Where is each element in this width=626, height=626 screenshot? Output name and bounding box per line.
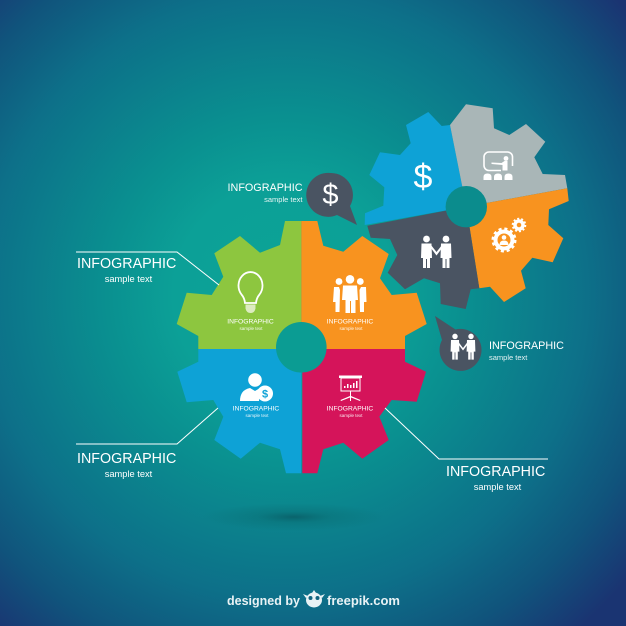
label: blue segment bbox=[233, 406, 279, 418]
label: left lower: sample text bbox=[105, 469, 153, 479]
callout: dollar bubble bbox=[306, 173, 357, 225]
label: crimson segment: INFOGRAPHIC bbox=[327, 406, 373, 412]
icon: three people bbox=[333, 275, 366, 313]
label: green segment: sample text bbox=[239, 326, 263, 331]
segment: gray bbox=[450, 104, 567, 207]
label: right callout: sample text bbox=[489, 353, 528, 362]
footer credit: designed by bbox=[227, 594, 300, 608]
icon: light bulb bbox=[238, 272, 262, 313]
label: left upper: sample text bbox=[105, 274, 153, 284]
icon: gears bbox=[493, 219, 525, 251]
label: left lower: INFOGRAPHIC bbox=[77, 451, 176, 467]
label: top callout bbox=[228, 182, 303, 204]
big gear bbox=[177, 221, 427, 473]
segment: crimson bbox=[302, 349, 426, 473]
label: right lower: INFOGRAPHIC bbox=[446, 464, 545, 480]
icon: presentation board bbox=[339, 376, 362, 401]
icon: handshake in bubble bbox=[451, 334, 475, 360]
label: crimson segment bbox=[327, 406, 373, 418]
icon: freepik logo bbox=[303, 590, 325, 608]
icon: presentation bbox=[484, 152, 512, 180]
label: left lower bbox=[77, 451, 176, 479]
segment: orange bbox=[466, 188, 569, 302]
label: crimson segment: sample text bbox=[339, 413, 363, 418]
footer credit bbox=[227, 590, 400, 608]
icon: person with dollar: $ bbox=[262, 388, 268, 400]
label: orange segment: sample text bbox=[339, 326, 363, 331]
label: orange segment bbox=[327, 318, 373, 331]
segment: blue bbox=[365, 112, 466, 225]
leader line: right lower bbox=[385, 408, 548, 459]
label: left upper: INFOGRAPHIC bbox=[77, 256, 176, 272]
label: left upper bbox=[77, 256, 176, 284]
icon: dollar in bubble: $ bbox=[322, 179, 339, 211]
label: right lower bbox=[446, 464, 545, 492]
callout: handshake bubble bbox=[435, 316, 482, 371]
label: right callout bbox=[489, 340, 564, 362]
gear shadow bbox=[202, 503, 386, 531]
hub bbox=[276, 322, 327, 373]
label: right callout: INFOGRAPHIC bbox=[489, 340, 564, 352]
icon: dollar: $ bbox=[414, 158, 433, 196]
segment: green bbox=[177, 221, 301, 349]
icon: handshake bbox=[421, 236, 452, 268]
label: green segment bbox=[227, 318, 274, 331]
hub bbox=[446, 186, 487, 227]
segment: orange bbox=[301, 221, 427, 349]
label: blue segment: sample text bbox=[245, 413, 269, 418]
small gear bbox=[365, 104, 569, 309]
label: top callout: sample text bbox=[264, 195, 303, 204]
segment: blue bbox=[177, 349, 301, 473]
segment: dark bbox=[367, 207, 479, 309]
leader line: left upper bbox=[76, 252, 219, 285]
leader line: left lower bbox=[76, 408, 218, 444]
label: green segment: INFOGRAPHIC bbox=[227, 318, 274, 326]
label: blue segment: INFOGRAPHIC bbox=[233, 406, 279, 412]
label: top callout: INFOGRAPHIC bbox=[228, 182, 303, 194]
label: orange segment: INFOGRAPHIC bbox=[327, 318, 373, 326]
footer credit: freepik.com bbox=[327, 593, 400, 608]
label: right lower: sample text bbox=[474, 482, 522, 492]
icon: person with dollar bbox=[240, 373, 273, 402]
